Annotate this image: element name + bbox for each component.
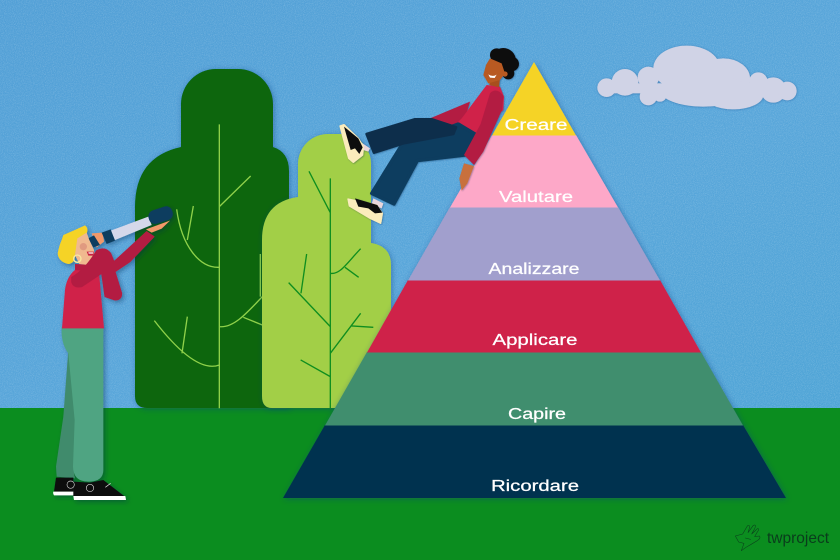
dark tree veins — [154, 124, 262, 408]
level: Analizzare — [408, 207, 660, 280]
icon: hand — [735, 525, 760, 551]
level: Applicare — [367, 280, 701, 352]
torso, head, telescope — [58, 205, 175, 328]
figure: climber leaning on the pyramid — [340, 48, 519, 223]
tree: light green — [262, 134, 391, 408]
figure: observer with telescope — [53, 205, 175, 500]
logo: twproject: twproject — [767, 530, 830, 547]
level: Applicare: Applicare — [492, 332, 578, 349]
level: Capire: Capire — [508, 406, 566, 423]
level: Analizzare: Analizzare — [488, 261, 580, 278]
light tree veins — [289, 171, 373, 408]
pyramid — [283, 62, 786, 498]
level: Valutare — [450, 135, 618, 208]
tree: dark green — [135, 69, 289, 408]
legs — [53, 327, 126, 500]
level: Capire — [325, 352, 743, 426]
level: Ricordare — [283, 425, 786, 498]
sky background — [0, 0, 840, 410]
level: Ricordare: Ricordare — [491, 478, 579, 495]
level: Creare — [492, 62, 576, 136]
ground — [0, 408, 840, 560]
level: Valutare: Valutare — [499, 189, 573, 206]
level: Creare: Creare — [504, 117, 568, 134]
logo: twproject — [735, 525, 830, 551]
cloud — [597, 46, 797, 109]
